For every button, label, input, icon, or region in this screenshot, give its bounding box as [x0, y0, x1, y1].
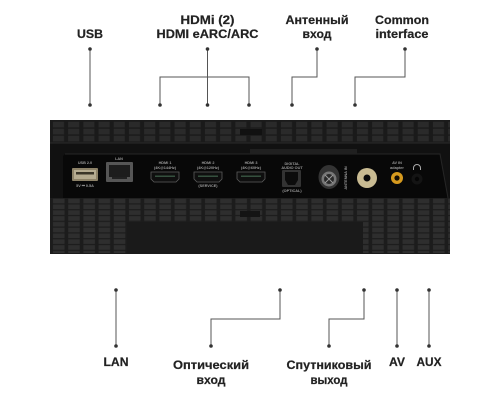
label: optical: вход [196, 375, 226, 387]
label: common interface: interface [376, 29, 428, 41]
label: common interface: Common [375, 15, 429, 27]
port: digital audio out: DIGITAL [285, 162, 300, 166]
port: USB: USB 2.0 [78, 161, 92, 165]
label: satellite: выход [310, 375, 348, 387]
label: HDMI: HDMi (2) [180, 15, 235, 27]
label: antenna: вход [302, 29, 332, 41]
connector: USB [88, 47, 92, 107]
label: common interface [375, 15, 429, 41]
port: USB: 5V ⎓ 0.5A [76, 184, 94, 188]
port: LAN [106, 157, 133, 182]
label: AUX: AUX [416, 357, 442, 369]
label: LAN: LAN [104, 357, 128, 369]
port: HDMI 2: (4K@120Hz) [197, 166, 220, 170]
label: HDMI: HDMI eARC/ARC [156, 29, 258, 41]
port: digital audio out [281, 162, 303, 193]
port: LAN: LAN [115, 157, 123, 161]
connector: AUX [427, 288, 431, 348]
port: HDMI 1: HDMI 1 [159, 161, 171, 165]
connector: common interface [353, 47, 407, 107]
label: USB: USB [77, 29, 103, 41]
port: HDMI 1: (4K@144Hz) [154, 166, 177, 170]
label: optical: Оптический [173, 360, 249, 372]
label: antenna: Антенный [286, 15, 348, 27]
connector: LAN [114, 288, 118, 348]
port: HDMI 2 [194, 161, 222, 188]
label: antenna [286, 15, 348, 41]
label: satellite [286, 360, 372, 387]
port: antenna in [318, 165, 348, 190]
port: digital audio out: AUDIO OUT [281, 166, 303, 170]
port: digital audio out: (OPTICAL) [282, 189, 302, 193]
port: antenna in: ANTENNA IN [344, 166, 348, 190]
label: satellite: Спутниковый [286, 360, 372, 372]
port: satellite output [357, 168, 377, 188]
panel: TV back [50, 120, 450, 254]
port: HDMI 1 [151, 161, 179, 182]
connector: AV [395, 288, 399, 348]
port: AV in [390, 161, 404, 184]
connector: HDMI [158, 47, 251, 107]
connector: antenna [290, 47, 319, 107]
label: AV: AV [389, 357, 405, 369]
port: HDMI 2: (SERVICE) [198, 184, 218, 188]
port: HDMI 2: HDMI 2 [202, 161, 214, 165]
label: HDMI [156, 15, 258, 41]
connector: optical [209, 288, 282, 348]
port: HDMI 3: HDMI 3 [245, 161, 257, 165]
port: HDMI 3 [237, 161, 265, 182]
port: AV in: adapter [390, 166, 404, 170]
port: AV in: AV IN [392, 161, 402, 165]
label: optical [173, 360, 249, 387]
port: USB [72, 161, 98, 188]
port: headphones [412, 165, 422, 184]
connector: satellite [327, 288, 366, 348]
port: HDMI 3: (4K@60Hz) [241, 166, 262, 170]
